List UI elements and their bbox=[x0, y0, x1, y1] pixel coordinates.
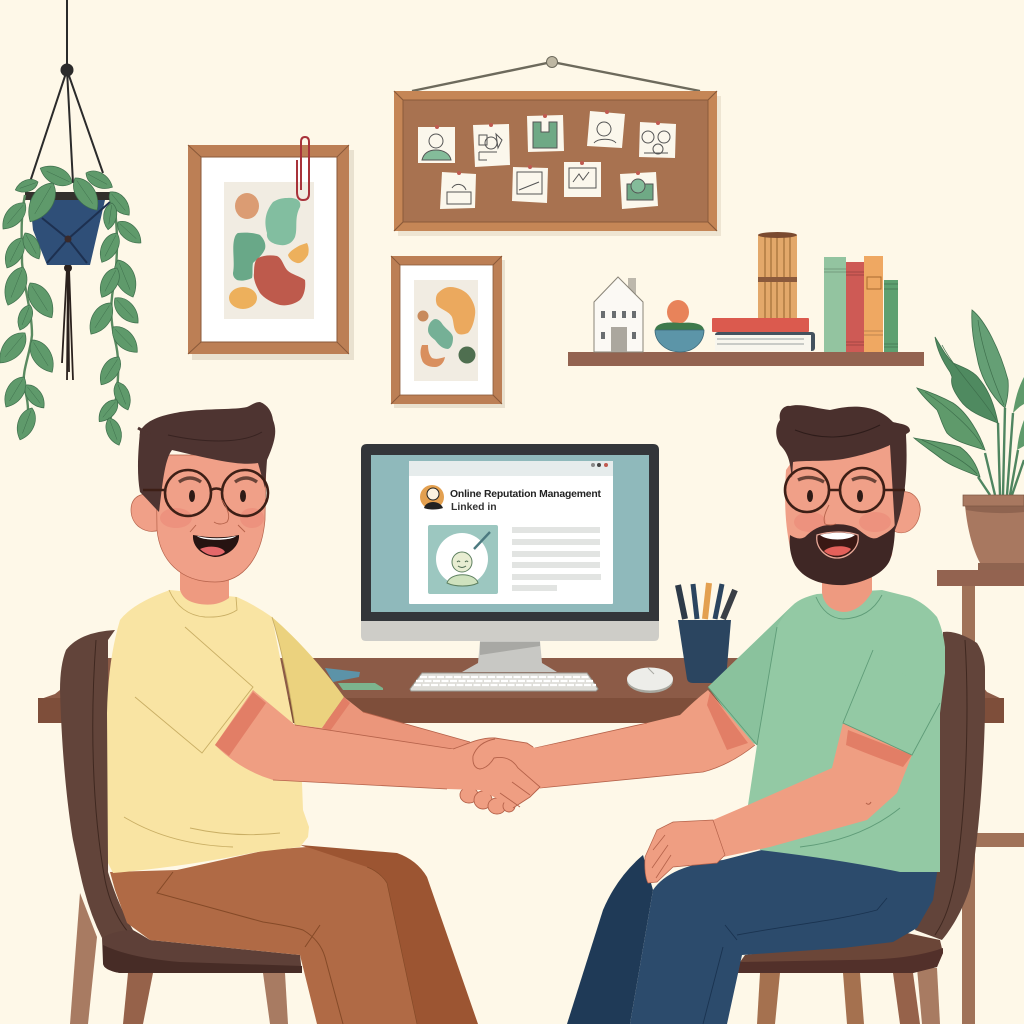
browser window: Linked in bbox=[451, 502, 497, 513]
profile picture bbox=[428, 525, 498, 594]
right arm to handshake bbox=[535, 690, 755, 788]
flat books bbox=[712, 318, 815, 351]
neck bbox=[822, 572, 872, 612]
profile avatar bbox=[420, 485, 444, 510]
navy trousers bbox=[567, 847, 937, 1024]
left man bbox=[107, 402, 478, 1024]
framed art: large bbox=[188, 145, 354, 360]
wall shelf with objects bbox=[568, 232, 924, 366]
notebooks on desk bbox=[325, 668, 383, 690]
hanging plant bbox=[0, 0, 146, 448]
toy house bbox=[594, 277, 643, 352]
browser window bbox=[409, 461, 613, 604]
right head bbox=[776, 405, 920, 585]
yellow shirt bbox=[107, 590, 344, 873]
neck bbox=[180, 570, 229, 605]
desk bbox=[38, 658, 1004, 723]
cork board bbox=[394, 56, 721, 236]
handshake bbox=[447, 738, 560, 814]
striped cylinder bbox=[758, 232, 797, 318]
plant stand bbox=[937, 570, 1024, 1024]
keyboard bbox=[410, 673, 598, 691]
left arms bbox=[215, 690, 470, 789]
pinned notes bbox=[418, 111, 676, 209]
page heading: Online Reputation Management bbox=[450, 489, 602, 500]
potted plant bbox=[914, 310, 1024, 570]
hand on knee bbox=[645, 820, 725, 883]
note sketches bbox=[422, 122, 670, 204]
left head bbox=[131, 402, 275, 582]
upright books bbox=[824, 256, 898, 352]
right forearm bbox=[713, 723, 912, 857]
sleeve flap bbox=[135, 627, 253, 753]
left chair bbox=[60, 630, 302, 1024]
framed art: small bbox=[391, 256, 505, 408]
sleeve flap bbox=[843, 650, 940, 755]
right man bbox=[535, 405, 945, 1024]
pen cup bbox=[678, 583, 735, 683]
right chair bbox=[738, 632, 985, 1024]
placeholder text lines bbox=[512, 527, 601, 591]
monitor bbox=[361, 444, 659, 672]
mouse bbox=[627, 668, 673, 693]
trousers bbox=[110, 845, 478, 1024]
paperclip bbox=[297, 137, 309, 200]
fruit bowl bbox=[655, 300, 704, 352]
green shirt bbox=[708, 590, 945, 872]
